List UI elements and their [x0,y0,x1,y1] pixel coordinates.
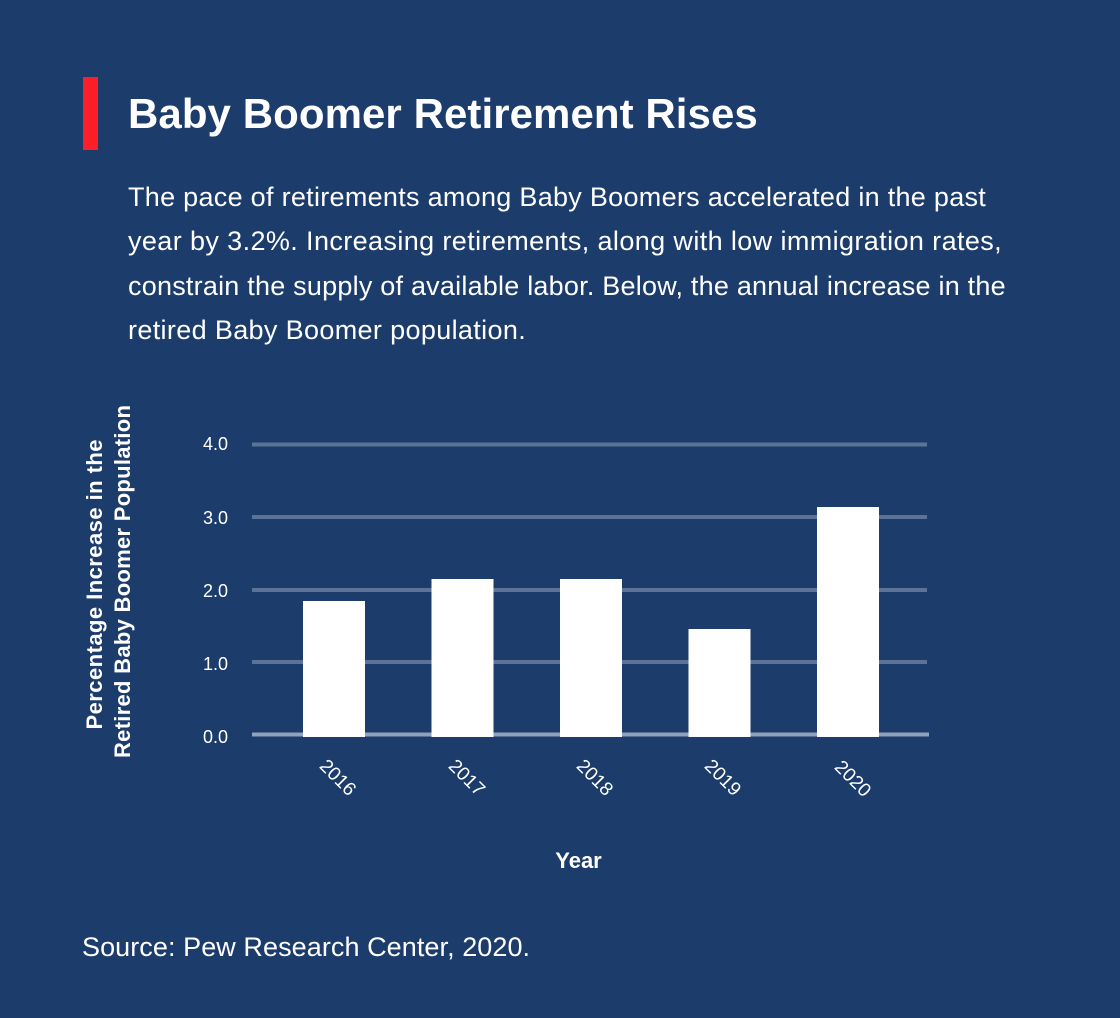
y axis labels [203,434,228,747]
y axis title: Retired Baby Boomer Population [110,405,135,758]
y axis title: Percentage Increase in the [82,440,107,730]
grid lines [252,444,929,734]
y axis labels: 2.0 [203,581,228,601]
source note: Source: Pew Research Center, 2020. [82,932,530,962]
x axis labels: 2017 [444,756,489,800]
title: Baby Boomer Retirement Rises [128,90,758,137]
x axis labels: 2019 [700,756,745,800]
y axis labels: 1.0 [203,654,228,674]
x axis labels: 2016 [315,756,360,800]
y axis title [82,405,135,758]
intro text: year by 3.2%. Increasing retirements, along with low immigration rates, [128,226,1002,256]
bar chart [82,405,929,873]
intro text [128,182,1006,345]
x axis labels: 2018 [572,756,617,800]
intro text: constrain the supply of available labor. Below, the annual increase in the [128,271,1006,301]
x axis title: Year [555,848,602,873]
bars [303,507,879,737]
accent bar [83,77,98,150]
x axis labels [315,756,875,801]
intro text: retired Baby Boomer population. [128,315,526,345]
intro text: The pace of retirements among Baby Boomers accelerated in the past [128,182,986,212]
y axis labels: 3.0 [203,508,228,528]
y axis labels: 0.0 [203,727,228,747]
y axis labels: 4.0 [203,434,228,454]
x axis labels: 2020 [830,757,875,801]
